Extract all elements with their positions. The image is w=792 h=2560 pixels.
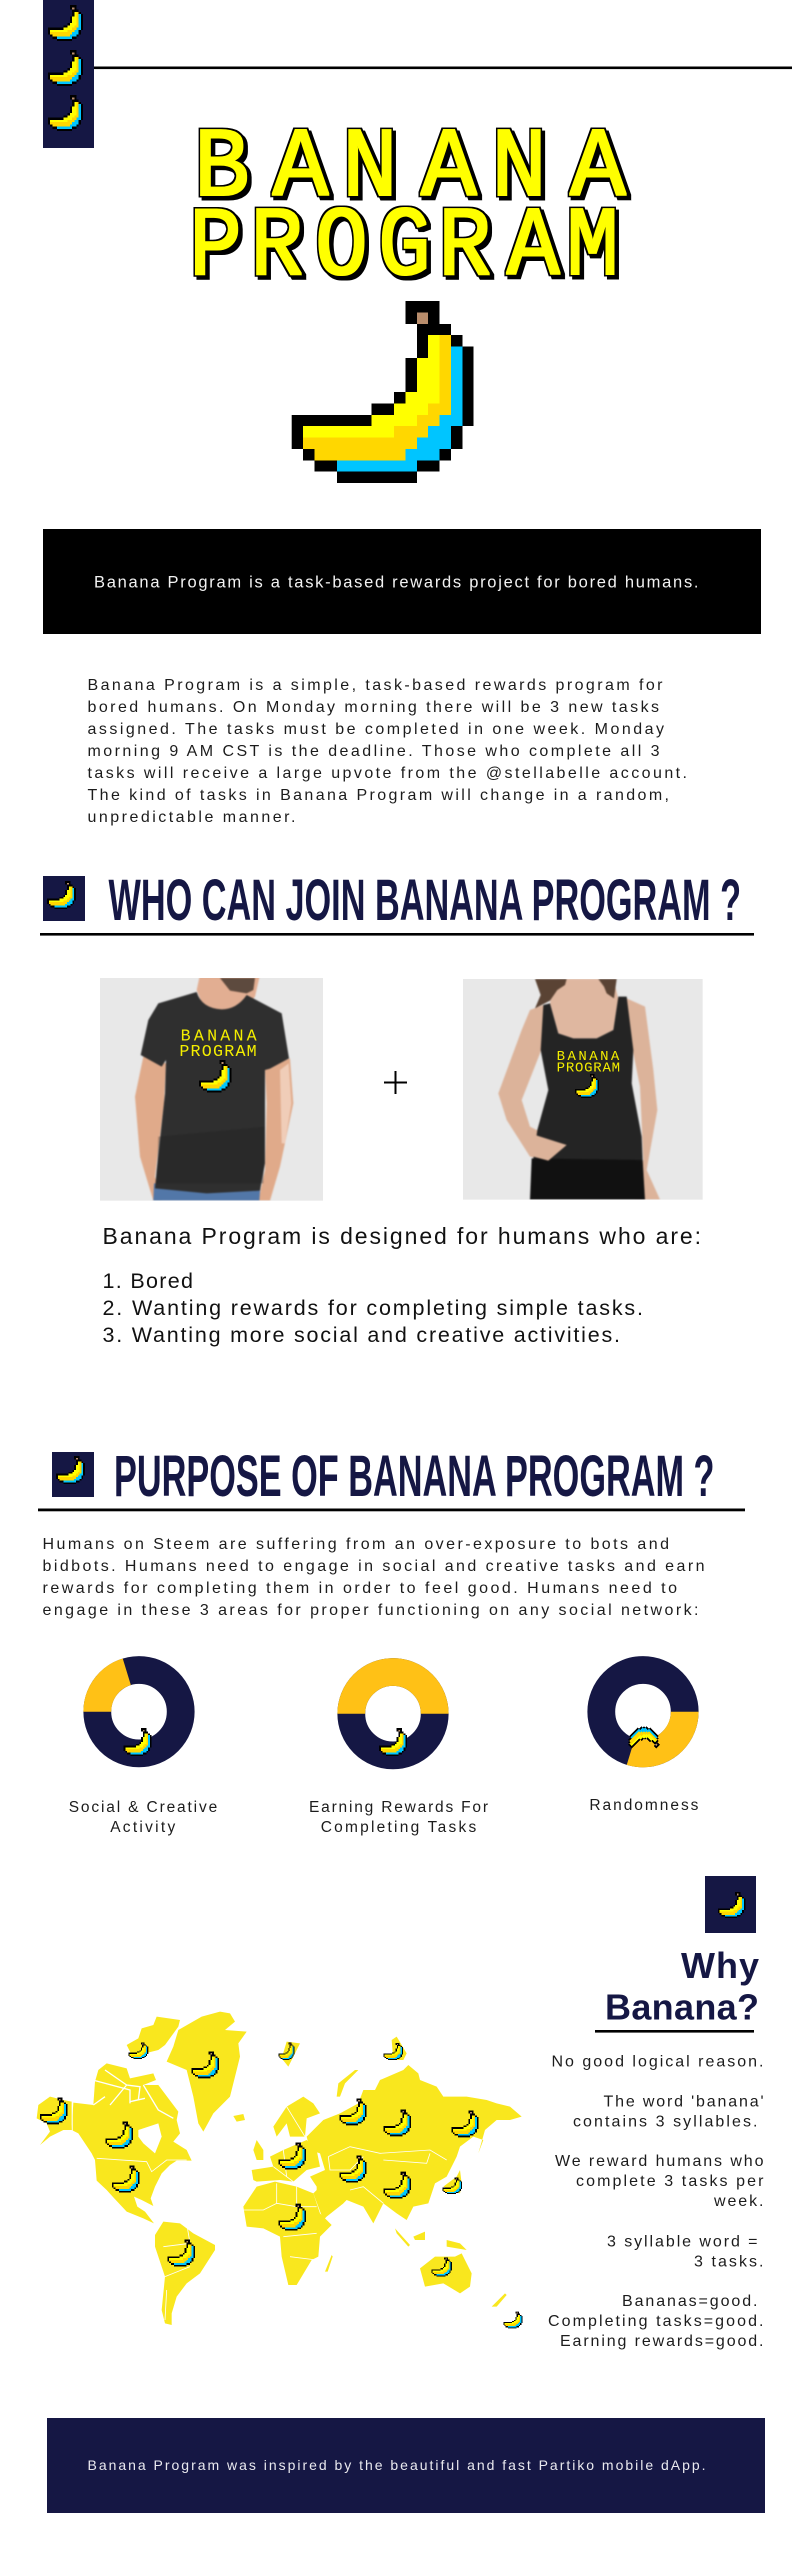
banana icon column: [43, 0, 94, 148]
intro paragraph: The kind of tasks in Banana Program will change in a random,: [88, 787, 669, 804]
donut label: social and creative: Activity: [110, 1819, 175, 1836]
numbered list of who can join: 2. Wanting rewards for completing simple tasks.: [102, 1296, 643, 1320]
donut chart: randomness: [601, 1670, 685, 1761]
heading icon: [43, 876, 85, 921]
why banana explanation: We reward humans who: [555, 2153, 764, 2170]
why banana explanation: Completing tasks=good.: [548, 2313, 764, 2330]
donut label: social and creative: [69, 1799, 217, 1836]
numbered list of who can join: 1. Bored: [102, 1269, 193, 1293]
donut chart: social and creative activity: [97, 1670, 181, 1756]
why banana explanation: Bananas=good.: [622, 2293, 758, 2310]
black intro banner: [43, 529, 761, 634]
heading icon: [52, 1452, 94, 1497]
why banana explanation: complete 3 tasks per: [576, 2173, 764, 2190]
large pixel banana: [292, 301, 474, 483]
title: Banana Program: [189, 113, 626, 303]
why banana explanation: week.: [713, 2193, 764, 2210]
footer banner: [47, 2418, 765, 2513]
why banana explanation: 3 syllable word =: [607, 2234, 758, 2250]
plus sign: [384, 1071, 407, 1094]
intro paragraph: Banana Program is a simple, task-based rewards program for: [88, 677, 663, 694]
title: Banana Program: PROGRAM: [189, 192, 619, 303]
tank print: [557, 1049, 620, 1098]
purpose paragraph: rewards for completing them in order to feel good. Humans need to: [42, 1580, 677, 1597]
donut label: earning rewards: Earning Rewards For: [309, 1799, 488, 1816]
black intro banner: Banana Program is a task-based rewards project for bored humans.: [94, 574, 698, 592]
heading icon: [705, 1876, 756, 1933]
why banana explanation: The word 'banana': [604, 2094, 764, 2110]
section heading: why banana: [595, 1876, 759, 2033]
footer banner: Banana Program was inspired by the beautiful and fast Partiko mobile dApp.: [88, 2457, 706, 2473]
why banana explanation: No good logical reason.: [552, 2054, 764, 2070]
section heading: why banana: Banana?: [605, 1986, 759, 2028]
header strip with banana column and rule: [43, 0, 792, 148]
photo: woman in banana tank top: [463, 979, 703, 1200]
purpose paragraph: engage in these 3 areas for proper functioning on any social network:: [42, 1602, 699, 1619]
purpose paragraph: bidbots. Humans need to engage in social and creative tasks and earn: [42, 1558, 704, 1575]
world map with bananas: [37, 2012, 523, 2328]
shirt print: PROGRAM: [179, 1043, 257, 1062]
why banana explanation: [548, 2054, 764, 2350]
why banana explanation: Earning rewards=good.: [560, 2333, 764, 2350]
donut label: randomness: Randomness: [589, 1797, 699, 1814]
tank print: BANANA: [557, 1049, 620, 1065]
map landmasses: [37, 2012, 522, 2325]
intro paragraph: unpredictable manner.: [88, 809, 296, 826]
intro paragraph: [88, 677, 687, 826]
donut label: earning rewards: Completing Tasks: [321, 1819, 476, 1836]
shirt print: [179, 1028, 257, 1093]
tank print: PROGRAM: [557, 1060, 620, 1076]
title: Banana Program: BANANA: [194, 113, 626, 225]
donut label: earning rewards: [309, 1799, 488, 1836]
intro paragraph: assigned. The tasks must be completed in one week. Monday: [88, 721, 664, 738]
photo: man in banana t-shirt: [100, 975, 323, 1201]
purpose paragraph: Humans on Steem are suffering from an over-exposure to bots and: [42, 1536, 669, 1553]
why banana explanation: 3 tasks.: [694, 2254, 764, 2270]
intro paragraph: tasks will receive a large upvote from the @stellabelle account.: [88, 765, 687, 782]
numbered list of who can join: 3. Wanting more social and creative activities.: [102, 1323, 620, 1347]
purpose paragraph: [42, 1536, 704, 1619]
section heading: why banana: Why: [681, 1945, 759, 1986]
intro paragraph: bored humans. On Monday morning there will be 3 new tasks: [88, 699, 659, 716]
why banana explanation: contains 3 syllables.: [573, 2114, 758, 2130]
numbered list of who can join: [102, 1269, 643, 1347]
map bananas: [40, 2042, 523, 2328]
who-can-join lead sentence: Banana Program is designed for humans who are:: [102, 1223, 701, 1249]
donut label: social and creative: Social & Creative: [69, 1799, 217, 1816]
donut chart: earning rewards: [351, 1672, 435, 1756]
intro paragraph: morning 9 AM CST is the deadline. Those who complete all 3: [88, 743, 660, 760]
shirt print: BANANA: [181, 1028, 257, 1047]
